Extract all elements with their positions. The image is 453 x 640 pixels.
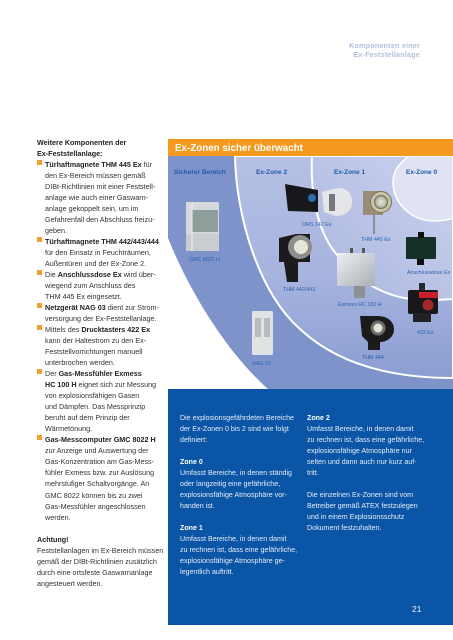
- device: GMC 8022 H: [186, 202, 220, 263]
- device: 422 Ex: 422 Ex: [417, 330, 434, 336]
- bullet list of components: THM 445 Ex eingesetzt.: [45, 292, 122, 301]
- zone labels: Ex-Zone 1: [334, 169, 365, 176]
- device: Anschlussdose Ex: [406, 232, 451, 276]
- device: 422 Ex: [408, 283, 438, 336]
- panel: zone definitions: [168, 389, 453, 625]
- text: intro, Zone 0 and Zone 1: der Ex-Zonen 0 bis 2 sind wie folgt: [180, 425, 289, 433]
- device: ORS 142 Ex: ORS 142 Ex: [302, 222, 332, 228]
- device: Anschlussdose Ex: Anschlussdose Ex: [407, 270, 451, 276]
- text: intro, Zone 0 and Zone 1: oder langzeitig eine gefährliche,: [180, 480, 280, 488]
- bullet list of components: Türhaftmagnete THM 442/443/444: [45, 237, 159, 246]
- text: intro, Zone 0 and Zone 1: definiert:: [180, 436, 207, 444]
- bullet list of components: Der Gas-Messfühler Exmess: [45, 369, 142, 378]
- panel title bar: Ex-Zonen sicher überwacht: [175, 143, 304, 154]
- text: Zone 2 and ATEX note: selten und dann auch nur kurz auf-: [307, 458, 417, 466]
- text: Zone 2 and ATEX note: tritt.: [307, 469, 319, 477]
- text: Zone 2 and ATEX note: Zone 2: [307, 414, 330, 422]
- bullet list of components: von explosionsfähigen Gasen: [45, 391, 139, 400]
- device: Exmess HC 100 H: Exmess HC 100 H: [338, 302, 382, 308]
- bullet list of components: anlage wie auch einer Gaswarn-: [45, 193, 148, 202]
- bullet list of components: versorgung der Ex-Feststellanlage.: [45, 314, 156, 323]
- text: Zone 2 and ATEX note: und in einem Explosionsschutz: [307, 513, 404, 521]
- section header: Komponenten einer Ex-Feststellanlage: Ex-Feststellanlage: [353, 50, 420, 59]
- bullet list of components: Mittels des Drucktasters 422 Ex: [45, 325, 150, 334]
- zone labels: Ex-Zone 2: [256, 169, 287, 176]
- device: Exmess HC 100 H: [337, 248, 382, 308]
- section header: Komponenten einer Ex-Feststellanlage: [349, 41, 420, 59]
- bullet list of components: Gas-Konzentration am Gas-Mess-: [45, 457, 154, 466]
- text: Zone 2 and ATEX note: zu rechnen ist, dass eine gefährliche,: [307, 436, 424, 444]
- zone labels: Sicherer Bereich: [174, 169, 226, 176]
- text: intro, Zone 0 and Zone 1: Zone 1: [180, 524, 203, 532]
- zone labels: [174, 169, 437, 176]
- page number: 21: [412, 604, 421, 614]
- text: intro, Zone 0 and Zone 1: handen ist.: [180, 502, 215, 510]
- device: GMC 8022 H: GMC 8022 H: [189, 257, 220, 263]
- section header: Komponenten einer Ex-Feststellanlage: Komponenten einer: [349, 41, 420, 50]
- text: intro, Zone 0 and Zone 1: [180, 414, 297, 576]
- bullet list of components: zur Anzeige und Auswertung der: [45, 446, 148, 455]
- text: intro, Zone 0 and Zone 1: legentlich auftritt.: [180, 568, 234, 576]
- text: Zone 2 and ATEX note: Dokument festzuhalten.: [307, 524, 382, 532]
- text: intro, Zone 0 and Zone 1: Die explosionsgefährdeten Bereiche: [180, 414, 294, 422]
- zone: Sicherer Bereich: [168, 156, 453, 389]
- bullet list of components: Die Anschlussdose Ex wird über-: [45, 270, 156, 279]
- text: Zone 2 and ATEX note: Die einzelnen Ex-Zonen sind vom: [307, 491, 413, 499]
- bullet list of components: Feststellanlagen im Ex-Bereich müssen: [37, 546, 163, 555]
- bullet list of components: Außentüren und der Ex-Zone 2.: [45, 259, 146, 268]
- panel title bar: [168, 139, 453, 156]
- bullet list of components: DIBt-Richtlinien mit einer Feststell-: [45, 182, 155, 191]
- panel: Ex-Zonen diagram: [168, 139, 453, 389]
- bullet list of components: GMC 8022 können bis zu zwei: [45, 490, 142, 500]
- bullet list of components: anlage gekoppelt sein, um im: [45, 204, 138, 213]
- bullet list of components: fühler Exmess bzw. zur Auslösung: [45, 468, 154, 477]
- bullet list of components: und Dämpfen. Das Messprinzip: [45, 402, 145, 411]
- bullet list of components: unterbrochen werden.: [45, 358, 115, 367]
- text: intro, Zone 0 and Zone 1: Umfasst Bereiche, in denen damit: [180, 535, 286, 543]
- bullet list of components: geben.: [45, 226, 67, 235]
- bullet list of components: Türhaftmagnete THM 445 Ex für: [45, 160, 152, 169]
- bullet list of components: werden.: [45, 513, 71, 522]
- bullet list of components: Gefahrenfall den Abschluss freizu-: [45, 215, 154, 224]
- bullet list of components: [37, 138, 163, 588]
- bullet list of components: HC 100 H eignet sich zur Messung: [45, 380, 156, 389]
- bullet list of components: gemäß der DIBt-Richtlinien zusätzlich: [37, 557, 157, 566]
- bullet list of components: Weitere Komponenten der: [37, 138, 126, 146]
- bullet list of components: beruht auf dem Prinzip der: [45, 413, 130, 422]
- text: intro, Zone 0 and Zone 1: explosionsfähige Atmosphäre vor-: [180, 491, 287, 499]
- device: ORS 142 Ex: [285, 184, 352, 228]
- bullet list of components: Netzgerät NAG 03 dient zur Strom-: [45, 303, 159, 312]
- bullet list of components: kann der Haltestrom zu den Ex-: [45, 336, 146, 345]
- text: intro, Zone 0 and Zone 1: Zone 0: [180, 458, 203, 466]
- zone: Ex-Zone 1: [312, 156, 453, 300]
- bullet list of components: angesteuert werden.: [37, 579, 103, 588]
- device: THM 444: THM 444: [362, 355, 384, 361]
- device: THM 445 Ex: THM 445 Ex: [361, 237, 391, 243]
- zone: Ex-Zone 0: [393, 156, 453, 221]
- zone: Ex-Zone 2: [235, 156, 453, 378]
- text: intro, Zone 0 and Zone 1: zu rechnen ist, dass eine gefährliche,: [180, 546, 297, 554]
- bullet list of components: Ex-Feststellanlage:: [37, 149, 103, 158]
- bullet list of components: Gas-Messcomputer GMC 8022 H: [45, 435, 156, 444]
- zone labels: Ex-Zone 0: [406, 169, 437, 176]
- bullet list of components: wiegend zum Anschluss des: [45, 281, 135, 290]
- device: THM 444: [360, 316, 394, 361]
- device: THM 442/443: THM 442/443: [283, 287, 315, 293]
- device: THM 445 Ex: [361, 191, 392, 243]
- text: Zone 2 and ATEX note: Umfasst Bereiche, in denen damit: [307, 425, 413, 433]
- text: Zone 2 and ATEX note: [307, 414, 424, 532]
- bullet list of components: für den Einsatz in Feuchträumen,: [45, 248, 151, 257]
- text: intro, Zone 0 and Zone 1: Umfasst Bereiche, in denen ständig: [180, 469, 292, 477]
- text: intro, Zone 0 and Zone 1: explosionsfähige Atmosphäre ge-: [180, 557, 285, 565]
- bullet list of components: Achtung!: [37, 535, 69, 544]
- device: THM 442/443: [279, 234, 315, 293]
- orange bullet markers: [37, 160, 42, 440]
- bullet list of components: Feststellvorrichtungen manuell: [45, 347, 142, 356]
- device: NAG 03: NAG 03: [252, 361, 271, 367]
- text: Zone 2 and ATEX note: Betreiber gemäß ATEX festzulegen: [307, 502, 418, 510]
- bullet list of components: Wärmetönung.: [45, 424, 92, 433]
- device: NAG 03: [252, 311, 273, 367]
- bullet list of components: mehrstufiger Schaltvorgänge. An: [45, 479, 149, 488]
- bullet list of components: den Ex-Bereich müssen gemäß: [45, 171, 146, 180]
- bullet list of components: durch eine ortsfeste Gaswarnanlage: [37, 568, 152, 577]
- bullet list of components: Gas-Messfühler angeschlossen: [45, 502, 146, 511]
- left text column: further components: [37, 138, 163, 588]
- text: Zone 2 and ATEX note: explosionsfähige Atmosphäre nur: [307, 447, 412, 455]
